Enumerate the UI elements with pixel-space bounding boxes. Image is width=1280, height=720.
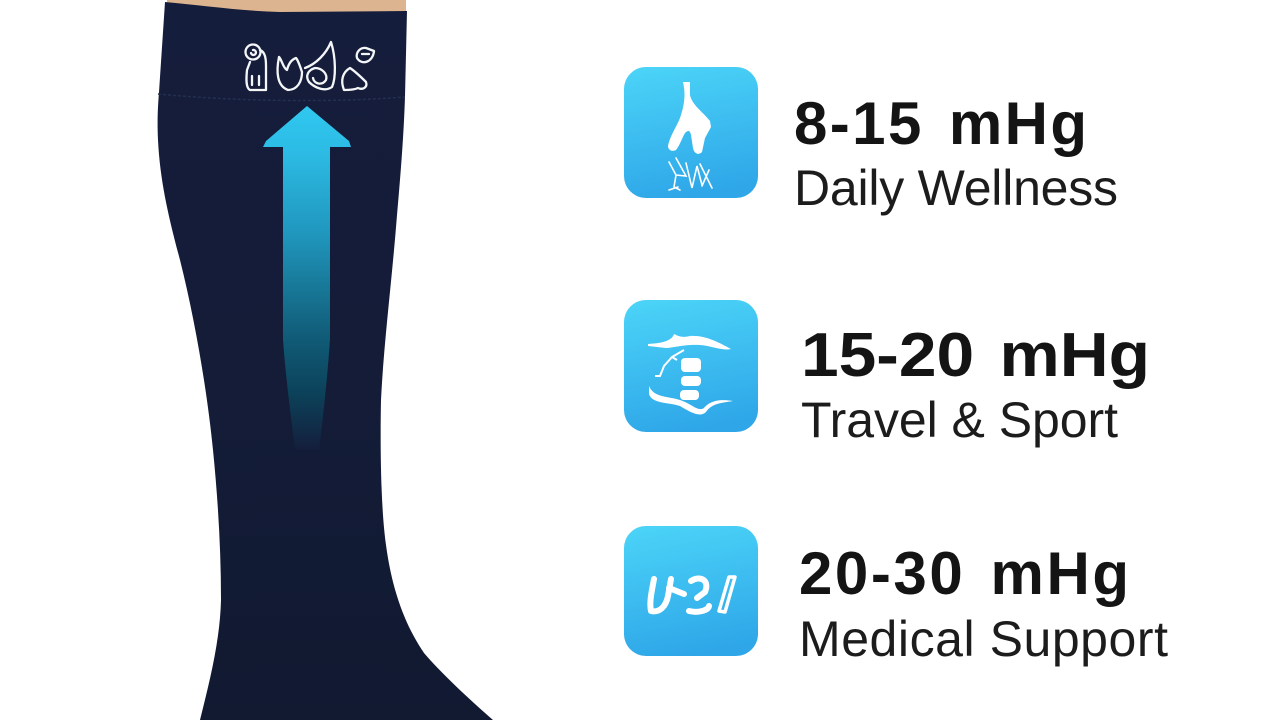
subtitle 3: Medical Support <box>799 611 1168 667</box>
icon 3: abstract glyph <box>650 577 735 612</box>
heading 1: 8-15 mHg <box>794 90 1087 157</box>
icon 2: wave and figure glyph <box>648 334 733 414</box>
subtitle 2: Travel & Sport <box>801 392 1118 448</box>
sock cuff seam <box>158 94 405 101</box>
upward gradient arrow <box>263 106 351 450</box>
icon tile 3 <box>624 526 758 656</box>
skin at top of leg <box>167 0 406 13</box>
icon tile 1 <box>624 67 758 198</box>
heading 3: 20-30 mHg <box>799 540 1129 607</box>
row 3: medical support <box>624 526 1168 667</box>
sock cuff logo glyphs <box>246 42 374 90</box>
compression sock <box>158 2 493 720</box>
icon tile 2 <box>624 300 758 432</box>
heading 2: 15-20 mHg <box>801 321 1150 390</box>
subtitle 1: Daily Wellness <box>794 160 1118 216</box>
row 1: daily wellness <box>624 67 1118 216</box>
row 2: travel and sport <box>624 300 1150 448</box>
icon 1: hand glyph <box>668 82 711 154</box>
